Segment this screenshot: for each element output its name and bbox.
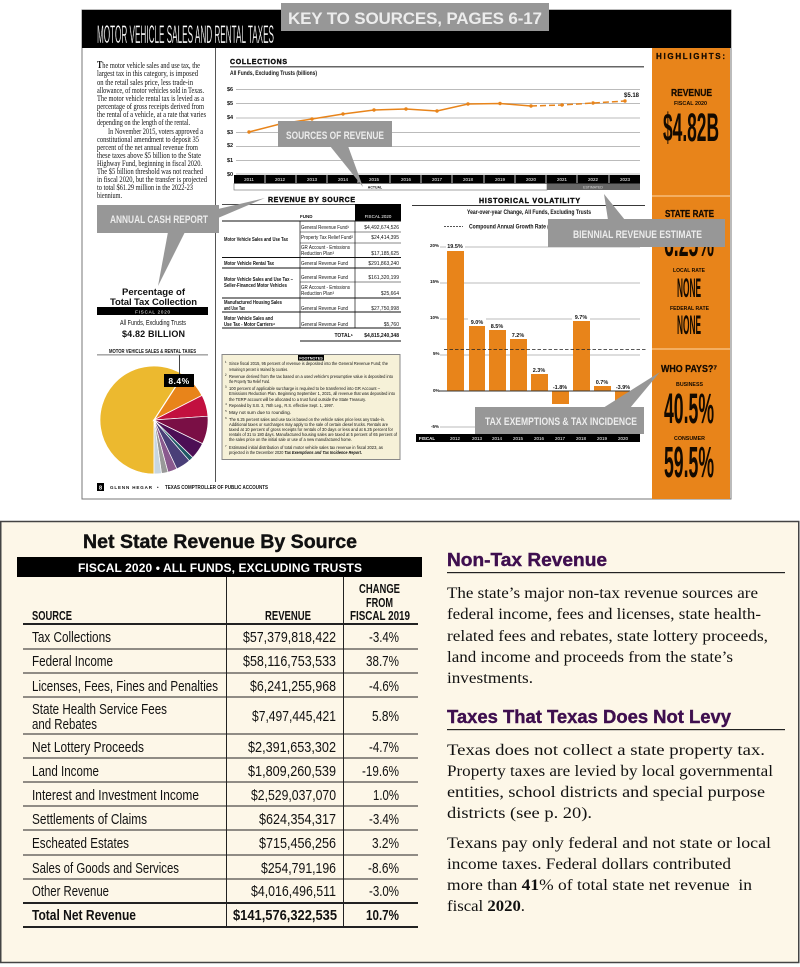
chart: collections line chart: $4 [227,115,234,121]
text: taxes body: entities, school districts and special purpose [447,784,765,801]
table: revenue by source: General Revenue Fund [301,261,348,267]
percentage of total tax collection block: MOTOR VEHICLE SALES & RENTAL TAXES [109,349,196,355]
panel: highlights sidebar: 59.5% [664,438,714,487]
table subtitle bar [17,557,422,577]
table: revenue by source: FISCAL 2020 [365,214,392,219]
table title: Net State Revenue By Source [83,532,357,553]
footer: • [157,485,159,490]
panel: highlights sidebar: LOCAL RATE [673,268,705,274]
chart: collections line chart: 2020 [526,177,537,182]
footnotes box: FOOTNOTES [299,356,323,360]
footnotes box: Since fiscal 2015, 95 percent of revenue is deposited into the General Revenue Fund; the [229,361,388,366]
chart: collections line chart: $5.18 [624,93,640,99]
chart: historical volatility: 2019 [597,436,608,441]
table: revenue by source: Licenses, Fees, Fines and Penalties [32,678,218,695]
callout: key to sources [281,3,549,31]
panel: highlights sidebar: FEDERAL RATE [670,306,709,312]
chart: pie [100,366,208,474]
table: revenue by source: FROM [366,595,393,610]
table: revenue by source: REVENUE BY SOURCE [268,197,355,204]
chart: historical volatility: 2018 [576,436,587,441]
table: revenue by source: 10.7% [366,907,399,924]
table: revenue by source: Net Lottery Proceeds [32,739,144,756]
text: taxes body: Texans pay only federal and not state or local [447,835,771,852]
text: taxes body: Property taxes are levied by local governmental [447,763,773,780]
footnotes box: Additional taxes or surcharges may apply to the sale of certain diesel trucks. Rentals are [229,422,388,427]
chart: historical volatility [412,198,646,442]
footer [97,483,269,492]
table: revenue by source: $58,116,753,533 [243,653,336,670]
chart: historical volatility: 8.5% [491,324,503,330]
table: revenue by source: State Health Service Fees [32,701,167,718]
text: taxes body: Texas does not collect a state property tax. [447,742,765,759]
table: revenue by source: General Revenue Fund [301,275,348,281]
table: revenue by source: Motor Vehicle Sales and Use Tax – [224,277,293,283]
footnotes box: ⁵ [225,409,227,414]
chart: collections line chart: 2011 [244,177,254,182]
table: revenue by source: $624,354,317 [259,811,336,828]
chart: collections line chart: COLLECTIONS [230,59,287,66]
percentage of total tax collection block: Percentage of [122,287,186,298]
chart: collections line chart: 2014 [338,177,349,182]
pie callout: 8.4%: 8.4% [168,376,190,386]
intro text: allowance, of motor vehicles sold in Texas. [97,86,204,95]
table: revenue by source: Reduction Plan³ [301,291,334,297]
table: revenue by source: Total Net Revenue [32,907,136,924]
chart: historical volatility: 15% [430,279,439,284]
table: revenue by source: FUND [300,214,313,219]
intro text: in fiscal 2020, but the transfer is projected [97,175,207,184]
intro text: on the retail sales price, less trade-in [97,78,193,87]
table: revenue by source [23,577,418,927]
footnotes box: ² [225,373,227,378]
footnotes box: ⁴ [225,402,227,407]
chart: historical volatility: 7.2% [512,333,524,339]
table: revenue by source: Settlements of Claims [32,811,147,828]
table: revenue by source: Property Tax Relief Fund² [301,235,353,241]
table: revenue by source: $2,529,037,070 [251,787,336,804]
footnotes box: Repealed by S.B. 3, 76th Leg., R.S. effective Sept. 1, 1997. [229,403,334,408]
table: revenue by source: $57,379,818,422 [243,629,336,646]
chart: historical volatility: 2013 [472,436,483,441]
panel: report page [82,3,731,499]
table: revenue by source: Reduction Plan³ [301,251,334,257]
panel: highlights sidebar: CONSUMER [674,436,705,442]
text: non-tax revenue body: federal income, fees and licenses, state health- [447,606,761,623]
chart: historical volatility: 2014 [492,436,503,441]
chart: historical volatility: 2.3% [533,368,545,374]
chart: historical volatility: 20% [430,243,439,248]
chart: historical volatility: 2016 [534,436,545,441]
chart: collections line chart: 2016 [401,177,412,182]
chart: historical volatility: 9.0% [471,320,483,326]
intro text: The motor vehicle rental tax is levied as a [97,94,204,103]
callout: key to sources: KEY TO SOURCES, PAGES 6-17 [288,9,542,28]
callout: tax exemptions and tax incidence [475,372,660,434]
chart: collections line chart: 2022 [588,177,599,182]
chart: historical volatility: Year-over-year Change, All Funds, Excluding Trusts [467,209,591,216]
chart: collections line chart: 2017 [432,177,443,182]
table: revenue by source: $7,497,445,421 [252,708,336,725]
table: revenue by source: General Revenue Fund¹ [301,225,349,231]
footnotes box: the Property Tax Relief Fund. [229,379,270,384]
chart: collections line chart: $5 [227,101,233,107]
table: revenue by source: $17,185,625 [371,251,399,257]
text: non-tax revenue body: land income and proceeds from the state’s [447,649,733,666]
chart: collections line chart: 2018 [463,177,474,182]
chart: historical volatility: -5% [431,424,439,429]
text: taxes body: income taxes. Federal dollars contributed [447,856,731,873]
chart: historical volatility: 0.7% [596,380,608,386]
table: revenue by source: Sales of Goods and Services [32,860,179,877]
footnotes box: Estimated initial distribution of total motor vehicle sales tax revenue in fiscal 2023, as [229,445,384,450]
footnotes box: the TERP account will be allocated to a trust fund outside the State Treasury. [229,397,366,402]
chart: historical volatility: 0% [433,388,440,393]
pie callout: 8.4% [164,355,194,387]
header band [82,10,731,49]
table: revenue by source: SOURCE [32,608,72,623]
intro text: percentage of gross receipts derived from [97,102,205,111]
panel: highlights sidebar: NONE [677,273,701,303]
chart: historical volatility: 9.7% [575,315,587,321]
table: revenue by source: REVENUE [265,608,311,623]
table: revenue by source: $291,863,240 [368,261,399,267]
callout: tax exemptions and tax incidence: TAX EXEMPTIONS & TAX INCIDENCE [485,416,637,428]
table: revenue by source: -3.4% [369,629,399,646]
table: revenue by source: $715,456,256 [259,835,336,852]
intro text: these taxes above $5 billion to the State [97,151,201,160]
chart: historical volatility: 10% [430,315,439,320]
chart: collections line chart: 2015 [369,177,380,182]
callout: sources of revenue [278,121,392,187]
panel: highlights sidebar [652,48,730,499]
table: revenue by source: Escheated Estates [32,835,129,852]
footnotes box: May not sum due to rounding. [229,410,291,415]
table: revenue by source: $2,391,653,302 [248,739,336,756]
chart: historical volatility: FISCAL [419,436,435,441]
panel: highlights sidebar: 6.25% [664,223,714,264]
table: revenue by source: Motor Vehicle Sales and Use Tax [224,237,288,243]
chart: collections line chart: $0 [227,172,233,178]
footnotes box: 100 percent of applicable surcharge is required to be transferred into GR Account – [229,386,380,391]
chart: collections line chart: $1 [227,158,233,164]
footnotes box: projected in the December 2020 Tax Exemptions and Tax Incidence Report. [229,450,362,455]
intro text: largest tax in this category, is imposed [97,69,198,78]
chart: collections line chart: 2012 [275,177,286,182]
table: revenue by source: $5,760 [384,322,399,328]
callout: biennial revenue estimate: BIENNIAL REVENUE ESTIMATE [573,229,702,241]
table: revenue by source: Motor Vehicle Rental Tax [224,261,274,267]
intro text: The motor vehicle sales and use tax, the [97,60,200,71]
text: non-tax revenue body: related fees and rebates, state lottery proceeds, [447,628,768,645]
chart: collections line chart: 2019 [495,177,506,182]
table: revenue by source: -3.4% [369,811,399,828]
text: taxes body [447,742,773,915]
footnotes box: ⁷ [225,444,227,449]
percentage of total tax collection block: All Funds, Excluding Trusts [120,320,186,327]
intro text [97,60,207,200]
chart: collections line chart: $3 [227,130,233,136]
table: revenue by source: General Revenue Fund [301,322,348,328]
table: revenue by source: $4,016,496,511 [251,883,336,900]
footnotes box: rentals of 31 to 180 days. Manufactured housing sales are taxed at 5 percent of 65 percent of [229,432,398,437]
callout: annual cash report [97,198,265,286]
table: revenue by source: $6,241,255,968 [250,678,336,695]
table: revenue by source: and Rebates [32,716,97,733]
intro text: depending on the length of the rental. [97,118,190,127]
footer: TEXAS COMPTROLLER OF PUBLIC ACCOUNTS [165,485,269,491]
table: revenue by source: $4,815,240,348 [364,333,399,339]
callout: biennial revenue estimate [548,194,725,247]
footnotes box: ¹ [225,360,227,365]
panel: highlights sidebar: FISCAL 2020 [674,101,707,107]
chart: historical volatility: Compound Annual Growth Rate ( [469,224,550,230]
table: revenue by source: Tax Collections [32,629,111,646]
footnotes box: The 6.25 percent sales and use tax is based on the vehicle sales price less any trade-in. [229,417,385,422]
text: taxes body: fiscal 2020. [447,898,525,915]
intro text: to total $61.29 million in the 2022-23 [97,183,193,192]
table: revenue by source: Seller-Financed Motor Vehicles [224,283,287,289]
intro text: constitutional amendment to deposit 35 [97,135,199,144]
table: revenue by source: Interest and Investment Income [32,787,199,804]
table: revenue by source: $1,809,260,539 [248,763,336,780]
heading: non-tax revenue: Non-Tax Revenue [447,550,607,570]
chart: historical volatility: 2020 [618,436,629,441]
chart: collections line chart: 2021 [557,177,568,182]
percentage of total tax collection block: Total Tax Collection [110,297,197,308]
text: taxes body: more than 41% of total state net revenue in [447,877,752,894]
intro text: biennium. [97,191,122,200]
footnotes box: remaining 5 percent is retained by counties. [229,367,288,372]
percentage of total tax collection block: $4.82 BILLION [122,329,185,339]
intro text: In November 2015, voters approved a [108,127,203,136]
intro text: The $5 billion threshold was not reached [97,167,203,176]
chart: historical volatility: 5% [433,351,440,356]
footnotes box [222,354,400,460]
table: revenue by source: -4.6% [369,678,399,695]
footnotes box: Emissions Reduction Plan. Beginning September 1, 2021, all revenue that was deposited into [229,391,395,396]
chart: collections line chart [227,59,644,190]
table: revenue by source: CHANGE [359,581,400,596]
table: revenue by source: $27,750,998 [371,306,399,312]
table: revenue by source: $25,664 [381,291,399,297]
table: revenue by source: -8.6% [368,860,399,877]
table: revenue by source: $161,320,199 [368,275,399,281]
table: revenue by source: $141,576,322,535 [233,907,337,924]
table: revenue by source: Other Revenue [32,883,109,900]
table: revenue by source: Manufactured Housing Sales [224,300,282,306]
intro text: the rental of a vehicle, at a rate that varies [97,110,206,119]
table: revenue by source: and Use Tax [224,306,245,312]
table: revenue by source: GR Account - Emissions [301,285,350,291]
intro text: Highway Fund, beginning in fiscal 2020. [97,159,202,168]
chart: historical volatility: 2012 [450,436,461,441]
chart: historical volatility: 2015 [513,436,524,441]
chart: collections line chart: All Funds, Excluding Trusts (billions) [230,70,317,77]
table: revenue by source: FISCAL 2019 [350,608,410,623]
table: revenue by source: GR Account - Emissions [301,245,350,251]
percentage of total tax collection block: FISCAL 2020 [135,310,171,314]
chart: collections line chart: $6 [227,87,233,93]
panel: highlights sidebar: HIGHLIGHTS: [656,52,725,61]
footnotes box: Revenue derived from the tax based on a used vehicle's presumptive value is deposited into [229,374,393,379]
footnotes box: the sales price on the initial sale or use of a new manufactured home. [229,437,352,442]
panel: highlights sidebar: STATE RATE [665,209,714,220]
table: revenue by source [222,197,401,341]
heading: taxes that texas does not levy: Taxes That Texas Does Not Levy [447,707,731,727]
callout: sources of revenue: SOURCES OF REVENUE [286,130,384,142]
chart: collections line chart: 2023 [620,177,631,182]
footnotes box: ³ [225,385,227,390]
panel: highlights sidebar: WHO PAYS?⁷ [661,364,717,375]
table: revenue by source: -3.0% [369,883,399,900]
table: revenue by source: Use Tax - Motor Carriers⁴ [224,322,275,328]
table: revenue by source: General Revenue Fund [301,306,348,312]
panel: highlights sidebar: NONE [677,310,701,340]
table: revenue by source: $4,492,674,526 [364,225,399,231]
table subtitle bar: FISCAL 2020 • ALL FUNDS, EXCLUDING TRUSTS [78,561,362,575]
footnotes box: ⁶ [225,416,227,421]
chart: collections line chart: $2 [227,143,233,149]
chart: collections line chart: ACTUAL [368,186,383,190]
text: non-tax revenue body: The state’s major non-tax revenue sources are [447,585,758,602]
table: revenue by source: 3.2% [372,835,399,852]
table: revenue by source: -4.7% [369,739,399,756]
chart: collections line chart: ESTIMATED [583,186,603,190]
table: revenue by source: Federal Income [32,653,113,670]
table: revenue by source: Land Income [32,763,99,780]
panel: highlights sidebar: $4.82B [663,106,719,150]
panel: highlights sidebar: 40.5% [664,385,714,433]
footer: 8 [99,486,102,492]
table: revenue by source: $24,414,395 [371,235,399,241]
percentage of total tax collection block [97,287,208,355]
table: revenue by source: Motor Vehicle Sales and [224,316,273,322]
panel: highlights sidebar: REVENUE [671,88,712,99]
chart: historical volatility: -3.9% [616,385,630,391]
chart: historical volatility: 19.5% [447,244,463,250]
chart: historical volatility: 2017 [555,436,566,441]
chart: historical volatility: -1.8% [553,385,567,391]
footer: GLENN HEGAR [110,485,153,490]
footnotes box: taxed at 10 percent of gross receipts for rentals of 30 days or less and at 6.25 percent for [229,427,393,432]
panel: net state revenue [1,522,799,962]
header band: MOTOR VEHICLE SALES AND RENTAL TAXES [97,21,274,49]
chart: historical volatility: HISTORICAL VOLATILITY [479,198,580,205]
intro text: percent of the net annual revenue from [97,143,199,152]
text: non-tax revenue body: investments. [447,670,533,687]
text: taxes body: districts (see p. 20). [447,805,592,822]
table: revenue by source: -19.6% [362,763,399,780]
table: revenue by source: 1.0% [373,787,399,804]
panel: highlights sidebar: BUSINESS [676,382,703,388]
table: revenue by source: TOTAL⁵ [334,333,354,339]
callout: annual cash report: ANNUAL CASH REPORT [110,214,208,226]
text: non-tax revenue body [447,585,768,687]
table: revenue by source: 5.8% [372,708,399,725]
table: revenue by source: $254,791,196 [261,860,336,877]
chart: collections line chart: 2013 [307,177,318,182]
table: revenue by source: 38.7% [366,653,399,670]
